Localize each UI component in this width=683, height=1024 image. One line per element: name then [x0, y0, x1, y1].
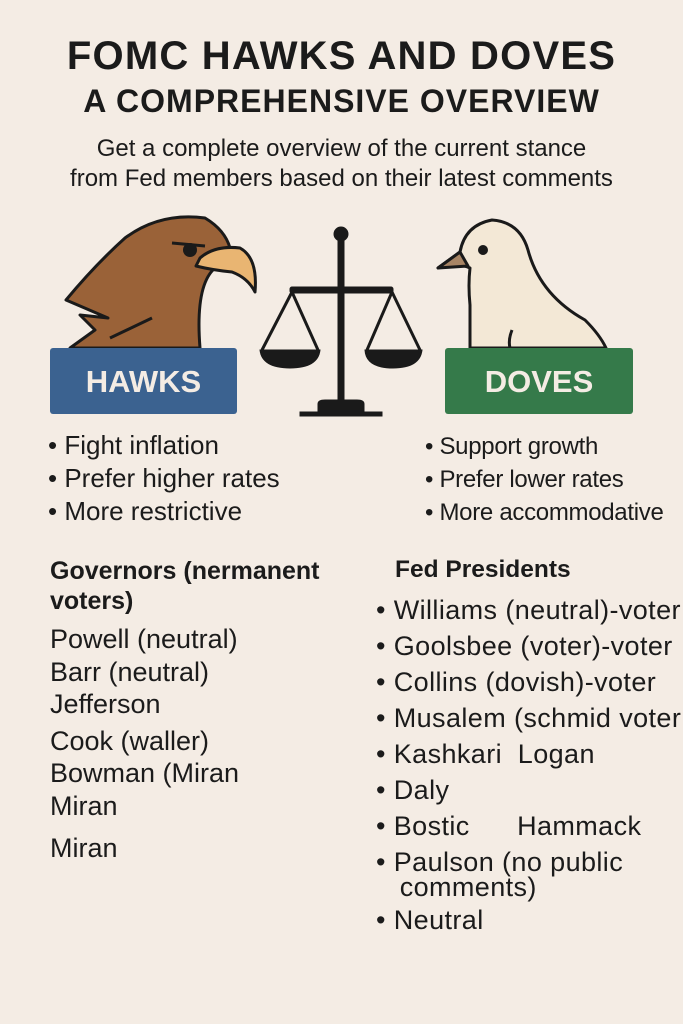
- label: doves: DOVES: [485, 364, 593, 399]
- governors list: Bowman (Miran: [50, 758, 239, 788]
- governors list: Jefferson Cook (waller): [50, 689, 209, 756]
- governors list: Miran Miran: [50, 790, 118, 863]
- title: FOMC HAWKS AND DOVES: [67, 34, 616, 78]
- fed presidents list: • Williams (neutral)-voter: [376, 595, 681, 625]
- hawks traits: • Prefer higher rates: [48, 463, 280, 493]
- intro text: from Fed members based on their latest comments: [70, 165, 613, 192]
- label: hawks: [50, 348, 237, 414]
- governors list: Barr (neutral): [50, 656, 209, 686]
- fed presidents list: • Collins (dovish)-voter: [376, 667, 656, 697]
- hawks traits: • More restrictive: [48, 496, 242, 526]
- governors heading: [50, 557, 320, 615]
- icon: dove: [438, 220, 606, 348]
- doves traits: • More accommodative: [425, 499, 664, 526]
- doves traits: • Support growth: [425, 433, 598, 460]
- fed presidents heading: Fed Presidents: [395, 556, 571, 583]
- fed presidents list: • Daly: [376, 775, 449, 805]
- subtitle heading: A COMPREHENSIVE OVERVIEW: [83, 83, 600, 119]
- icon: hawk: [66, 217, 255, 348]
- label: hawks: HAWKS: [86, 364, 201, 399]
- fed presidents list: • Neutral: [376, 905, 484, 935]
- fed presidents list: • Paulson (no public: [376, 847, 623, 877]
- governors list: Powell (neutral): [50, 624, 238, 654]
- hawks traits: • Fight inflation: [48, 430, 219, 460]
- governors list: [50, 624, 239, 863]
- icon: scale: [260, 227, 422, 416]
- governors heading: voters): [50, 587, 133, 615]
- label: doves: [445, 348, 633, 414]
- doves traits: [425, 433, 664, 526]
- intro text: Get a complete overview of the current stance: [97, 135, 586, 162]
- doves traits: • Prefer lower rates: [425, 466, 623, 493]
- fed presidents list: • Musalem (schmid voter: [376, 703, 681, 733]
- fed presidents list: • Kashkari Logan: [376, 739, 595, 769]
- intro text: [70, 135, 613, 192]
- hawks traits: [48, 430, 280, 526]
- governors heading: Governors (nermanent: [50, 557, 320, 585]
- fed presidents list: comments): [400, 872, 537, 902]
- illustration: hawk, scale, dove: [64, 215, 608, 416]
- fed presidents list: • Goolsbee (voter)-voter: [376, 631, 673, 661]
- fed presidents list: [376, 595, 681, 935]
- fed presidents list: • Bostic Hammack: [376, 811, 641, 841]
